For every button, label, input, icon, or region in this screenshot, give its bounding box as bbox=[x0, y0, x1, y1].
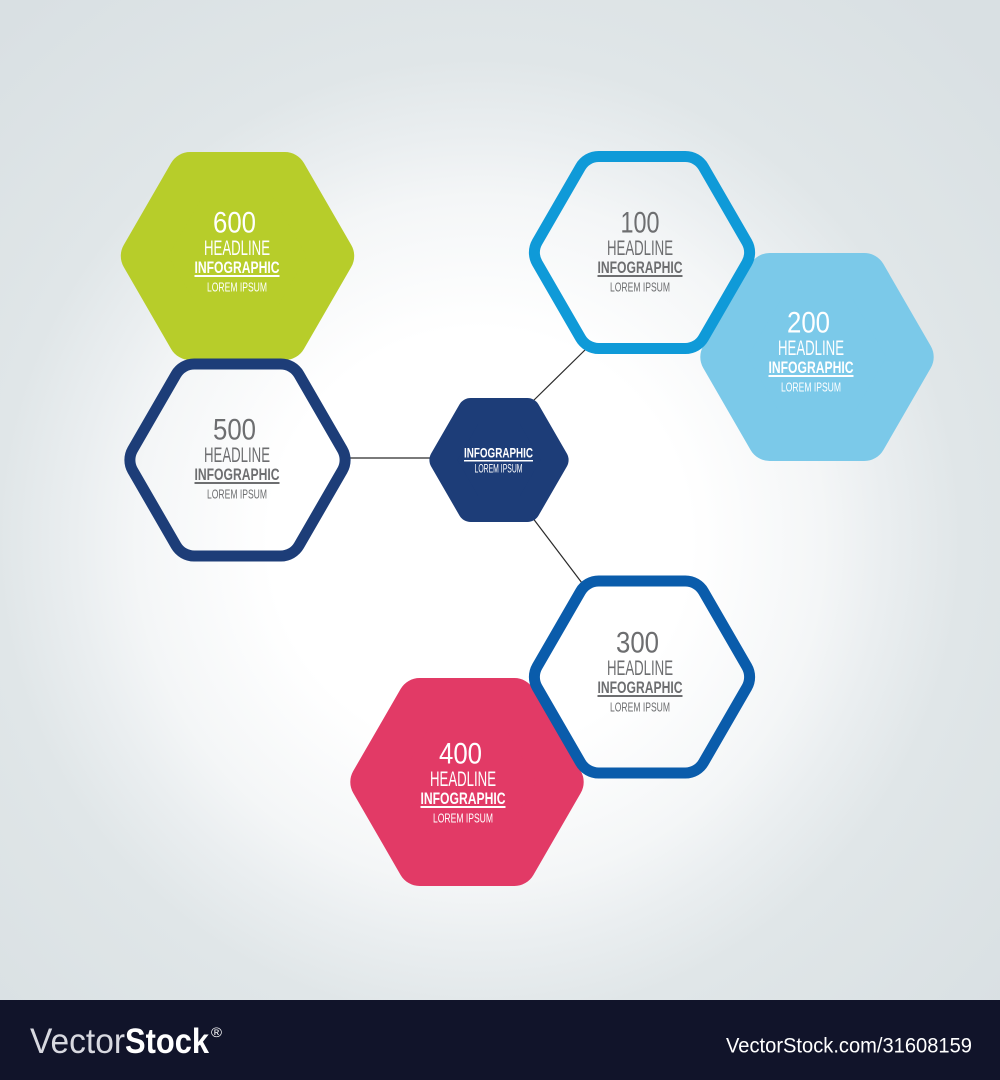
hexagon 600: HEADLINE bbox=[204, 237, 270, 260]
connector: center to 500 bbox=[345, 457, 432, 459]
hexagon 500 bbox=[130, 364, 345, 556]
hexagon 200: INFOGRAPHIC bbox=[768, 358, 854, 377]
hexagon 400: INFOGRAPHIC bbox=[420, 789, 506, 808]
footer logo bbox=[30, 1022, 223, 1061]
connector: center to 300 bbox=[532, 517, 582, 583]
footer logo: Vector bbox=[30, 1022, 125, 1061]
footer id: VectorStock.com/31608159 bbox=[726, 1034, 972, 1058]
hexagon 600: 600 bbox=[213, 206, 256, 240]
hexagon 500: 500 bbox=[213, 414, 256, 446]
hexagon 300: HEADLINE bbox=[607, 657, 673, 680]
hexagon 100: HEADLINE bbox=[607, 237, 673, 260]
hexagon 600 bbox=[143, 174, 332, 338]
hexagon 100: 100 bbox=[620, 206, 660, 240]
hexagon 200: HEADLINE bbox=[778, 337, 844, 360]
hexagon 300 bbox=[534, 581, 750, 773]
hexagon 500: LOREM IPSUM bbox=[207, 486, 267, 502]
center hexagon bbox=[442, 411, 556, 509]
footer band bbox=[0, 1000, 1000, 1080]
footer logo: ® bbox=[211, 1024, 223, 1040]
hexagon 200: LOREM IPSUM bbox=[781, 380, 841, 394]
center hexagon: LOREM IPSUM bbox=[475, 464, 522, 476]
connector: center to 100 bbox=[532, 349, 586, 402]
hexagon 500: INFOGRAPHIC bbox=[194, 465, 280, 484]
hexagon 400: 400 bbox=[439, 738, 482, 770]
hexagon 100 bbox=[534, 156, 750, 348]
hexagon 600: LOREM IPSUM bbox=[207, 280, 267, 294]
hexagon 200 bbox=[722, 275, 912, 439]
hexagon 200: 200 bbox=[787, 306, 830, 340]
hexagon 600: INFOGRAPHIC bbox=[194, 258, 280, 277]
hexagon 100: LOREM IPSUM bbox=[610, 280, 670, 294]
hexagon 500: HEADLINE bbox=[204, 444, 270, 467]
hexagon 100: INFOGRAPHIC bbox=[598, 258, 682, 277]
hexagon 300: INFOGRAPHIC bbox=[598, 678, 682, 697]
hexagon 400 bbox=[372, 700, 562, 864]
center hexagon: INFOGRAPHIC bbox=[464, 444, 533, 460]
hexagon 400: LOREM IPSUM bbox=[433, 810, 493, 826]
footer logo: Stock bbox=[125, 1022, 209, 1061]
hexagon 300: 300 bbox=[616, 626, 659, 660]
hexagon 400: HEADLINE bbox=[430, 768, 496, 791]
hexagon 300: LOREM IPSUM bbox=[610, 700, 670, 714]
